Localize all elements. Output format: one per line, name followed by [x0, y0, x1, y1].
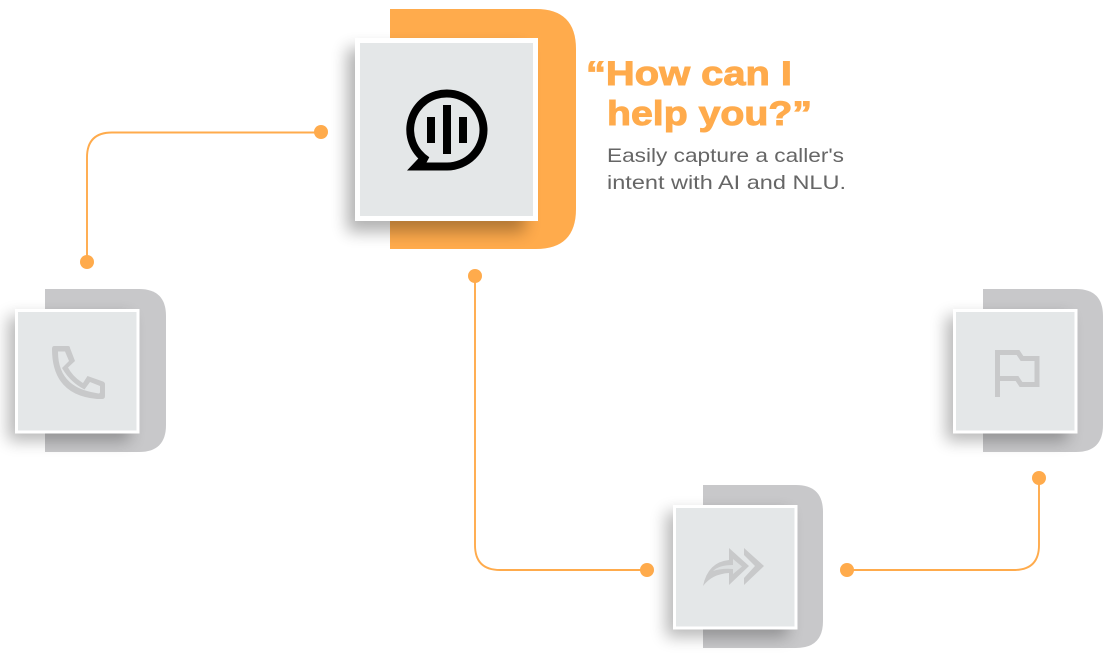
- heading: how can I help you: [586, 55, 812, 133]
- connector dot: main left: [314, 125, 328, 139]
- connector: transfer to flag: [847, 478, 1039, 570]
- text block: description: intent with AI and NLU.: [607, 172, 846, 194]
- connector dot: main bottom: [468, 269, 482, 283]
- connector dot: transfer left: [640, 563, 654, 577]
- text block: description: Easily capture a caller's: [607, 145, 844, 167]
- connector dot: phone top: [80, 255, 94, 269]
- connector dot: flag bottom: [1032, 471, 1046, 485]
- icon: speech bubble with sound bars: [406, 89, 488, 170]
- connector dot: transfer right: [840, 563, 854, 577]
- icon: double forward arrow: [703, 548, 764, 586]
- text block: description: [607, 145, 846, 194]
- panel: flag step: [946, 289, 1103, 452]
- heading: how can I help you: “How can I: [586, 55, 792, 93]
- panel: main speech step: [347, 9, 576, 249]
- icon: flag: [998, 352, 1037, 397]
- connector: main card to phone: [87, 132, 321, 262]
- icon: phone: [52, 346, 105, 399]
- connector: main card to transfer: [475, 276, 647, 570]
- heading: how can I help you: help you?”: [607, 95, 812, 133]
- panel: transfer step: [666, 485, 823, 648]
- panel: phone step: [8, 289, 166, 452]
